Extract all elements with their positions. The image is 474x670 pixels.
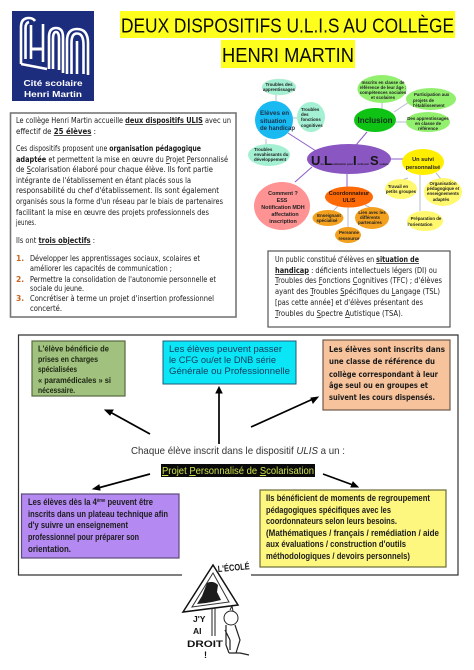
node: Des apprentissages en classe de référence: référence: [418, 126, 438, 131]
box: moments de regroupement: coordonnateurs selon leurs besoins.: [266, 516, 397, 526]
text: chaque élève inscrit: Chaque élève inscrit dans le dispositif ULIS a un :: [131, 445, 345, 457]
panel: public constitué: Troubles des Fonctions Cognitives (TFC) ; d'élèves: [274, 276, 442, 285]
node: Participation aux projets: l'établissement: [413, 103, 445, 108]
node: Organisation pédagogique: adaptés: [433, 197, 450, 202]
box: classe de référence: Les élèves sont inscrits dans: [329, 345, 445, 354]
box: moments de regroupement: (Mathématiques / français / remédiation / aide: [266, 528, 439, 538]
box: plateau technique: peuvent être: [105, 497, 153, 507]
node: Élèves en situation de handicap: situation: [260, 118, 286, 125]
node: Troubles envahissants du développement: développement: [254, 157, 287, 162]
logo: Cité scolaire Henri Martin: Henri Martin: [24, 90, 82, 99]
box: classe de référence: suivent les cours dispensés.: [329, 393, 435, 402]
title: HENRI MARTIN: [222, 44, 354, 67]
panel: présentation du dispositif: responsabilité du chef d'établissement. Ils sont également: [16, 186, 219, 195]
node: Organisation pédagogique: pédagogique et: [427, 186, 460, 191]
node: Personne ressource: ressource: [338, 236, 360, 241]
box: plateau technique: d'y suivre un enseignement: [28, 520, 128, 530]
node: Travail en petits groupes: [385, 179, 417, 199]
node: Personne ressource: Personne: [339, 230, 360, 235]
node: Organisation pédagogique: [424, 178, 462, 206]
node: Coordonnateur ULIS: Coordonnateur: [329, 191, 370, 197]
panel: présentation du dispositif: [10, 113, 236, 317]
illustration: panneau L'école j'y ai droit: !: [204, 650, 207, 660]
panel: présentation du dispositif: Permettre la consolidation de l'autonomie personnelle et: [30, 275, 216, 284]
node: centre ULIS: nclusion: [358, 162, 369, 166]
box: CFG et DNB: [163, 341, 296, 384]
node: Inscrits en classe de référence: [358, 75, 407, 103]
node: Inscrits en classe de référence: compétences sociales: [360, 90, 407, 95]
node: Troubles envahissants du développement: envahissants du: [254, 152, 289, 157]
node: Troubles des fonctions cognitives: fonctions: [301, 117, 321, 122]
node: Préparation de l'orientation: Préparation de: [411, 216, 442, 221]
panel: présentation du dispositif: concerté.: [30, 304, 62, 313]
panel: présentation du dispositif: 2.: [16, 275, 24, 284]
node: Inclusion: Inclusion: [358, 116, 393, 125]
node: Organisation pédagogique: Organisation: [429, 181, 457, 186]
arrow: vers classe de référence: [251, 397, 318, 427]
panel: présentation du dispositif: facilitant la mise en œuvre des projets professionnels des: [16, 208, 209, 217]
node: Enseignant spécialisé: spécialisé: [316, 218, 338, 223]
node: centre ULIS: ne: [320, 162, 324, 166]
panel: présentation du dispositif: Le collège Henri Martin accueille deux dispositifs ULIS avec un: [16, 116, 231, 125]
box: plateau technique: inscrits dans un plateau technique afin: [28, 509, 168, 519]
panel: cadre Projet Personnalisé: [18, 335, 458, 575]
panel: public constitué: Un public constitué d'élèves en situation de: [275, 255, 419, 264]
box: classe de référence: une classe de référence du: [329, 357, 435, 366]
panel: présentation du dispositif: sociale du jeune.: [30, 284, 84, 293]
panel: présentation du dispositif: 3.: [16, 294, 24, 303]
node: Des apprentissages en classe de référence: [406, 112, 450, 132]
panel: public constitué: ayant des Troubles Spécifiques du Langage (TSL): [275, 287, 440, 296]
panel: présentation du dispositif: améliorer les capacités de communication ;: [30, 264, 172, 273]
node: Troubles des fonctions cognitives: cognitives: [301, 123, 323, 128]
chart: carte mentale ULIS: [248, 75, 462, 243]
node: Lien avec les différents partenaires: différents: [360, 215, 381, 220]
panel: public constitué: [268, 251, 450, 327]
arrow: vers prises en charges: [105, 410, 150, 434]
node: Enseignant spécialisé: Enseignant: [317, 213, 341, 218]
node: Un suivi personnalisé: personnalisé: [406, 165, 440, 171]
panel: présentation du dispositif: Ces dispositifs proposent une organisation pédagogique: [16, 144, 201, 153]
panel: présentation du dispositif: Concrétiser à terme un projet d'insertion professionnel: [30, 294, 214, 303]
illustration: panneau L'école j'y ai droit: AI: [193, 626, 202, 636]
box: classe de référence: âge seul ou en groupes et: [329, 381, 428, 390]
node: Coordonnateur ULIS: [325, 186, 373, 208]
box: classe de référence: [323, 340, 450, 410]
node: Élèves en situation de handicap: de handicap: [260, 126, 295, 132]
node: Organisation pédagogique: enseignements: [427, 191, 460, 196]
node: Troubles des apprentissages: apprentissages: [263, 87, 296, 92]
node: Inscrits en classe de référence: et scolaires: [371, 95, 396, 100]
box: CFG et DNB: Générale ou Professionnelle: [169, 366, 290, 376]
node: Troubles des apprentissages: [262, 79, 296, 95]
box: plateau technique: [22, 494, 179, 558]
panel: présentation du dispositif: 1.: [16, 254, 24, 263]
logo: Cité scolaire Henri Martin: Cité scolaire: [24, 79, 83, 88]
box: plateau technique: ème: [97, 498, 106, 504]
node: centre ULIS: L: [324, 153, 332, 168]
node: Participation aux projets: [406, 88, 456, 110]
box: moments de regroupement: Ils bénéficient de moments de regroupement: [266, 493, 430, 503]
panel: public constitué: handicap : déficients intellectuels légers (DI) ou: [275, 266, 437, 275]
box: CFG et DNB: Les élèves peuvent passer: [169, 344, 282, 354]
node: Inscrits en classe de référence: Inscrits en classe de: [362, 80, 405, 85]
node: Lien avec les différents partenaires: partenaires: [358, 220, 382, 225]
node: Comment ?: affectation: [271, 212, 299, 218]
node: Des apprentissages en classe de référence: Des apprentissages: [407, 116, 449, 121]
node: Enseignant spécialisé: [312, 210, 344, 226]
box: plateau technique: professionnel pour préparer son: [28, 532, 139, 542]
box: prises en charges: [32, 341, 125, 396]
node: centre ULIS: colaire: [380, 162, 389, 166]
logo: Cité scolaire Henri Martin: [12, 11, 94, 101]
node: Un suivi personnalisé: Un suivi: [412, 157, 434, 163]
box: moments de regroupement: méthodologiques / devoirs personnels): [266, 551, 410, 561]
node: Comment ?: Comment ?: [268, 191, 298, 197]
arrow: vers regroupement: [323, 474, 358, 487]
box: prises en charges: nécessaire.: [38, 386, 75, 395]
panel: présentation du dispositif: intégrante de l'établissement en étant placés sous la: [16, 176, 191, 185]
box: prises en charges: L'élève bénéficie de: [38, 344, 110, 354]
panel: présentation du dispositif: Développer les apprentissages sociaux, scolaires et: [30, 254, 200, 263]
arrow: vers plateau technique: [93, 474, 150, 490]
panel: présentation du dispositif: Ils ont trois objectifs :: [16, 236, 95, 245]
node: Troubles des fonctions cognitives: Troubles: [301, 107, 320, 112]
arrow: vers CFG et DNB: [216, 387, 222, 444]
panel: présentation du dispositif: jeunes.: [15, 218, 36, 227]
node: centre ULIS: U: [311, 153, 320, 168]
node: Un suivi personnalisé: [402, 149, 444, 175]
panel: public constitué: Troubles du Spectre Autistique (TSA).: [274, 309, 403, 318]
title: [120, 11, 455, 68]
box: plateau technique: orientation.: [28, 544, 71, 554]
node: Participation aux projets: projets de: [413, 98, 435, 103]
node: Troubles envahissants du développement: [248, 144, 290, 166]
node: Troubles des fonctions cognitives: [297, 102, 325, 132]
node: Travail en petits groupes: Travail en: [388, 184, 408, 189]
node: Comment ?: Notification MDH: [261, 205, 305, 211]
illustration: panneau L'école j'y ai droit: J'Y: [193, 614, 206, 624]
box: plateau technique: Les élèves dès la 4: [28, 497, 109, 507]
node: Inclusion: [354, 108, 396, 132]
box: moments de regroupement: aux évaluations / construction d'outils: [266, 539, 406, 549]
panel: présentation du dispositif: organisés sous la forme d'un réseau par le biais de partenaires: [16, 197, 223, 206]
illustration: panneau L'école j'y ai droit: L'ÉCOLÉ: [217, 561, 250, 574]
node: Lien avec les différents partenaires: Lien avec les: [358, 210, 386, 215]
node: Comment ?: inscription: [269, 219, 297, 225]
box: moments de regroupement: [260, 490, 446, 567]
panel: présentation du dispositif: effectif de 25 élèves :: [16, 127, 96, 136]
node: centre ULIS: ocalisation pour: [332, 162, 354, 166]
node: Comment ?: [254, 182, 310, 230]
node: Préparation de l'orientation: [407, 211, 443, 231]
node: Comment ?: ESS: [277, 198, 288, 204]
node: Préparation de l'orientation: l'orientation: [408, 222, 433, 227]
panel: présentation du dispositif: adaptée et permettent la mise en œuvre du Projet Personnalisé: [16, 155, 228, 164]
node: Coordonnateur ULIS: ULIS: [343, 198, 356, 204]
node: Élèves en situation de handicap: Elèves en: [260, 110, 289, 117]
box: prises en charges: spécialisées: [38, 365, 77, 374]
node: Inscrits en classe de référence: référence de leur âge :: [360, 85, 407, 90]
node: Troubles des apprentissages: Troubles des: [265, 82, 293, 87]
node: centre ULIS: S: [370, 153, 379, 168]
node: Personne ressource: [335, 227, 361, 243]
panel: public constitué: [pas cette année] et d'élèves présentant des: [275, 298, 423, 307]
node: Troubles des fonctions cognitives: des: [301, 112, 309, 117]
box: classe de référence: collège correspondant à leur: [329, 370, 438, 379]
node: Des apprentissages en classe de référence: en classe de: [415, 121, 442, 126]
panel: présentation du dispositif: de Scolarisation élaboré pour chaque élève. Ils font partie: [16, 165, 213, 174]
box: prises en charges: prises en charges: [38, 355, 98, 364]
box: prises en charges: « paramédicales » si: [38, 376, 111, 385]
node: centre ULIS: [307, 144, 391, 174]
illustration: panneau L'école j'y ai droit: [183, 561, 250, 660]
illustration: panneau L'école j'y ai droit: DROIT: [187, 639, 224, 649]
box: CFG et DNB: le CFG ou/et le DNB série: [169, 355, 276, 365]
heading: Projet Personnalisé de Scolarisation: Projet Personnalisé de Scolarisation: [162, 466, 314, 477]
node: Troubles envahissants du développement: Troubles: [254, 147, 273, 152]
node: Travail en petits groupes: petits groupes: [386, 189, 417, 194]
node: Élèves en situation de handicap: [255, 101, 295, 139]
node: Participation aux projets: Participation aux: [414, 92, 450, 97]
box: moments de regroupement: pédagogiques spécifiques avec les: [266, 505, 391, 515]
node: centre ULIS: I: [353, 153, 357, 168]
node: Lien avec les différents partenaires: [355, 207, 389, 229]
